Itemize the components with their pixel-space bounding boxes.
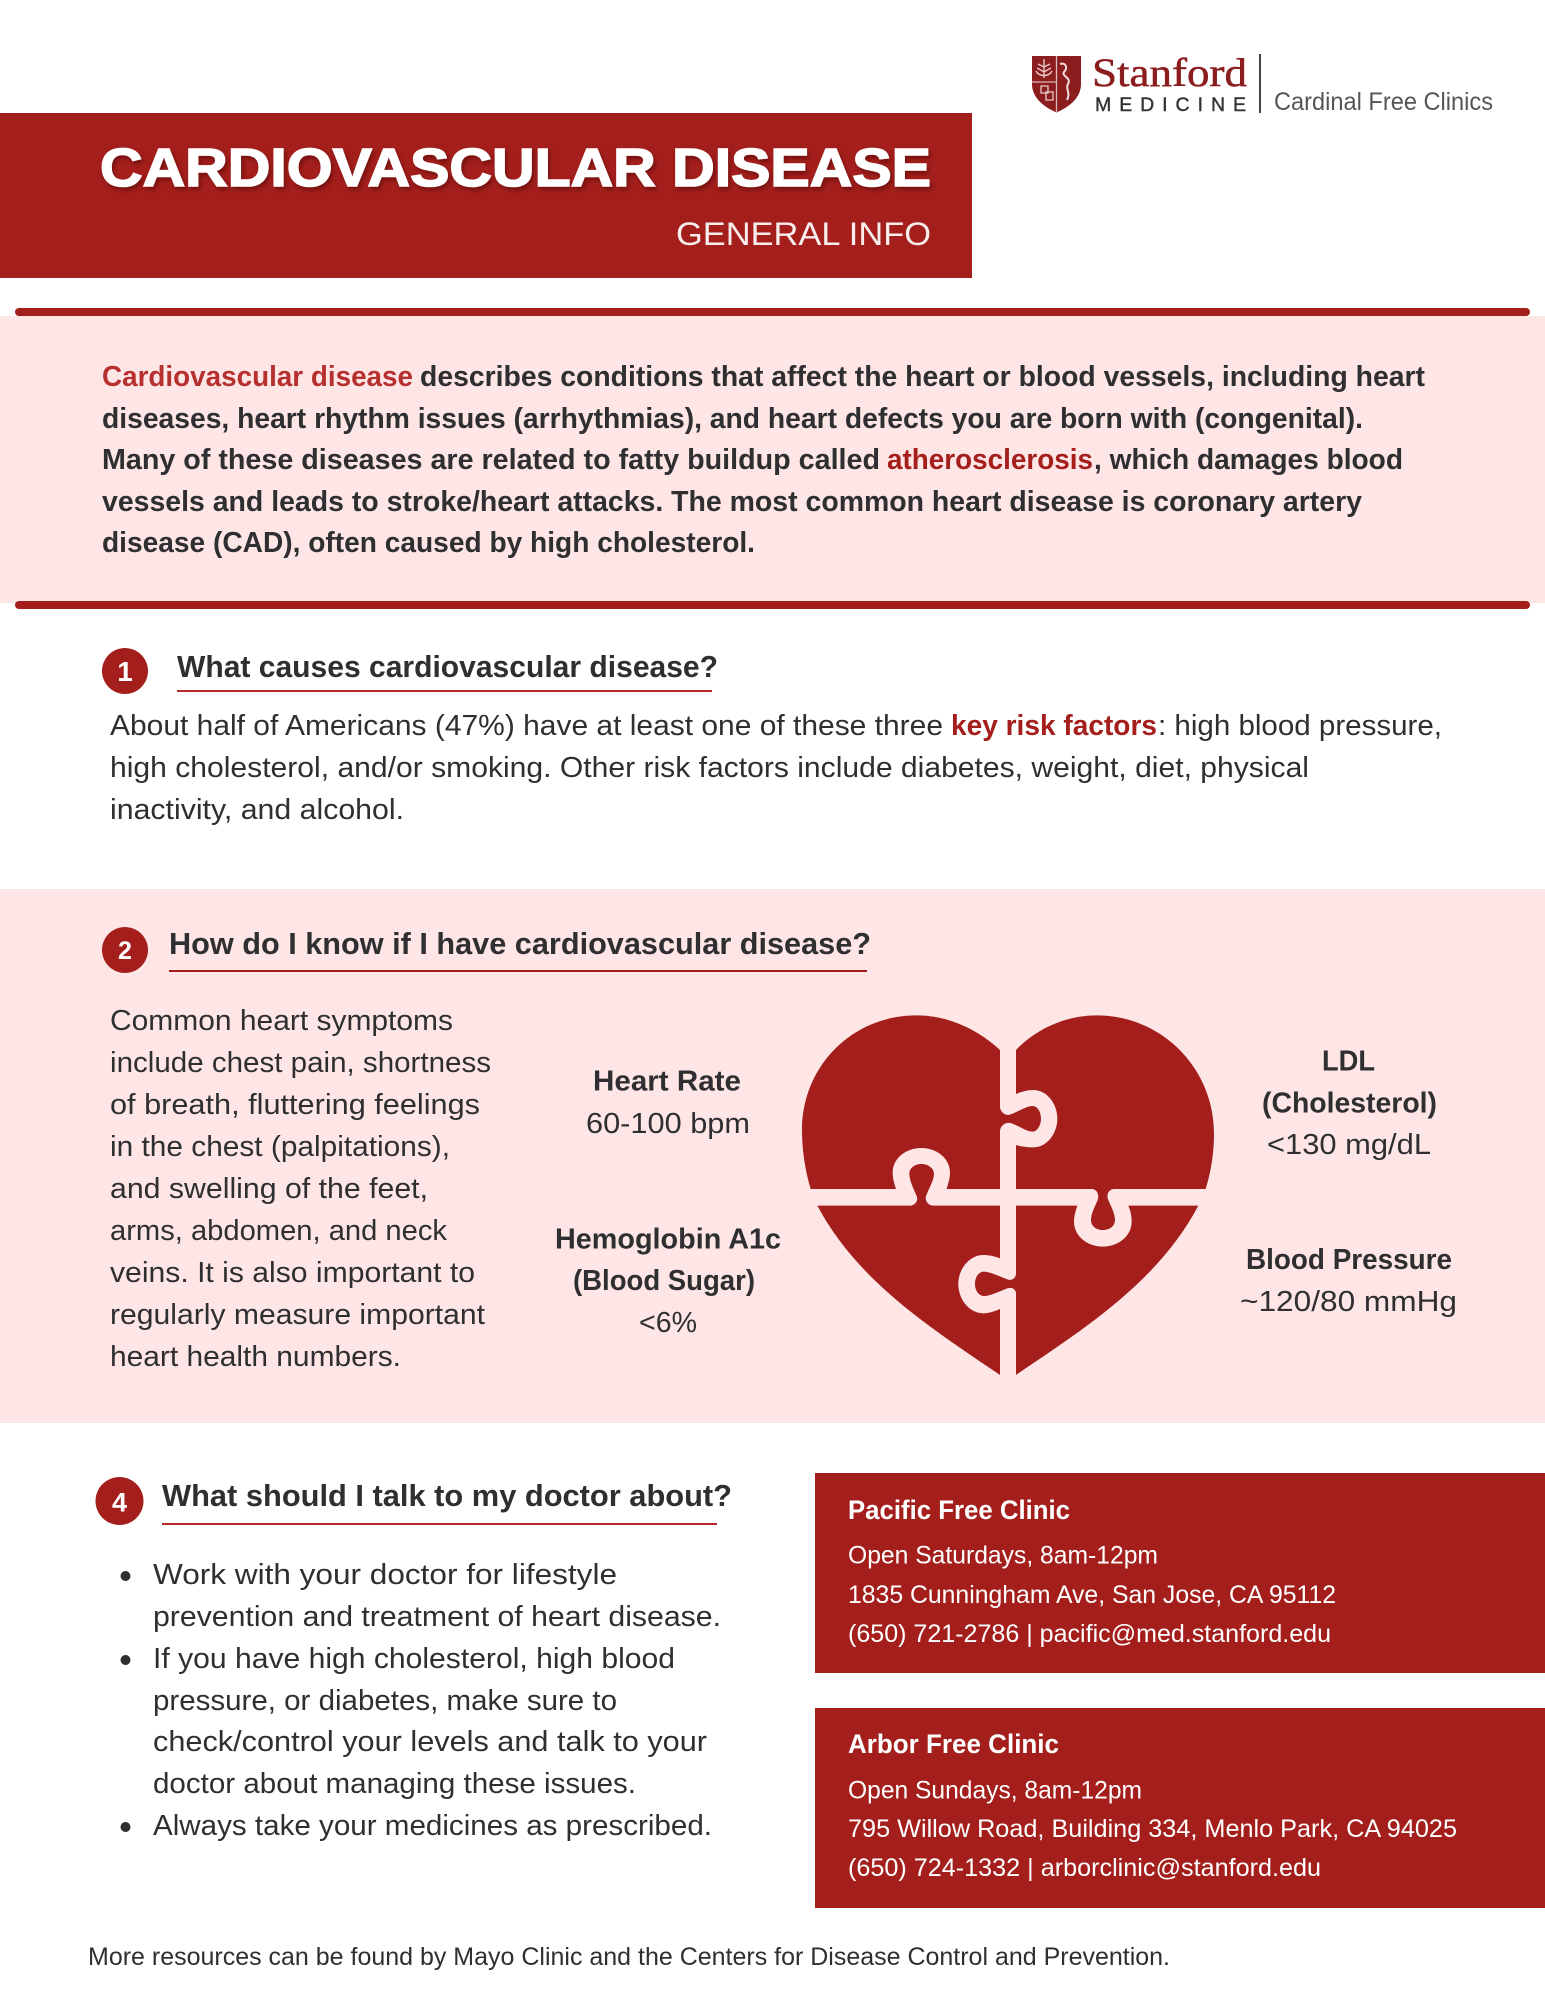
icon: puzzle heart [802,1015,1214,1375]
symptoms text: include chest pain, shortness [110,1047,491,1079]
panel: Arbor Free Clinic: 795 Willow Road, Building 334, Menlo Park, CA 94025 [848,1815,1457,1843]
panel: intro definition [0,308,1545,609]
panel: Pacific Free Clinic: (650) 721-2786 | pacific@med.stanford.edu [848,1620,1331,1648]
stat: hemoglobin: <6% [639,1307,697,1339]
intro text: atherosclerosis [887,444,1093,476]
symptoms text: regularly measure important [110,1299,485,1331]
stat: hemoglobin: Hemoglobin A1c [555,1224,781,1256]
section 1: causes [102,648,1442,826]
badge 1: 1 [117,656,133,687]
logo: Stanford Medicine Cardinal Free Clinics [1032,50,1493,116]
panel: Arbor Free Clinic [815,1708,1545,1908]
body text 1 [110,710,1442,826]
panel: diagnosis [0,889,1545,1423]
title: CARDIOVASCULAR DISEASE [100,138,931,198]
intro text [102,361,1425,559]
panel: Arbor Free Clinic: (650) 724-1332 | arborclinic@stanford.edu [848,1854,1321,1882]
bullet list: doctor about managing these issues. [153,1768,636,1800]
heading 4: What should I talk to my doctor about? [162,1478,732,1513]
intro text: , which damages blood [1094,444,1403,476]
bullet list [120,1559,721,1842]
intro text: Many of these diseases are related to fatty buildup called [102,444,880,476]
subtitle: GENERAL INFO [676,216,931,252]
stat: hemoglobin [555,1224,781,1339]
panel: Pacific Free Clinic: Pacific Free Clinic [848,1495,1070,1525]
title banner [0,113,972,278]
panel: Pacific Free Clinic: Open Saturdays, 8am-12pm [848,1542,1158,1570]
bullet list: pressure, or diabetes, make sure to [153,1685,617,1717]
stat: heart rate: Heart Rate [593,1066,741,1098]
body text 1: key risk factors [951,710,1157,742]
symptoms text: Common heart symptoms [110,1005,453,1037]
badge 2: 2 [118,937,132,965]
badge 4: 4 [112,1488,127,1518]
bullet list: check/control your levels and talk to your [153,1726,707,1758]
bullet list: Always take your medicines as prescribed. [153,1810,712,1842]
body text 1: About half of Americans (47%) have at least one of these three [110,710,943,742]
panel: Arbor Free Clinic: Arbor Free Clinic [848,1729,1059,1759]
logo: Stanford Medicine Cardinal Free Clinics: MEDICINE [1095,94,1246,116]
icon: Stanford shield [1032,56,1081,112]
section 4: doctor talk [96,1477,732,1842]
panel: Arbor Free Clinic: Open Sundays, 8am-12pm [848,1776,1142,1804]
panel: Pacific Free Clinic: 1835 Cunningham Ave, San Jose, CA 95112 [848,1581,1336,1609]
stat: LDL: <130 mg/dL [1267,1129,1431,1161]
logo: Stanford Medicine Cardinal Free Clinics: Stanford [1092,50,1247,95]
panel: Pacific Free Clinic [815,1473,1545,1673]
badge 4 [96,1477,144,1525]
intro text: disease (CAD), often caused by high cholesterol. [102,527,755,559]
symptoms text: and swelling of the feet, [110,1173,428,1205]
stat: LDL: (Cholesterol) [1262,1088,1437,1120]
badge 1 [102,648,148,694]
bullet list: prevention and treatment of heart disease. [153,1601,721,1633]
symptoms text: arms, abdomen, and neck [110,1215,447,1247]
symptoms text [110,1005,491,1373]
symptoms text: of breath, fluttering feelings [110,1089,480,1121]
body text 1: : high blood pressure, [1158,710,1442,742]
bullet list: Work with your doctor for lifestyle [153,1559,617,1591]
intro text: vessels and leads to stroke/heart attacks. The most common heart disease is coronary artery [102,486,1362,518]
intro text: diseases, heart rhythm issues (arrhythmias), and heart defects you are born with (congenital). [102,403,1363,435]
stat: LDL [1262,1046,1437,1161]
intro text: describes conditions that affect the heart or blood vessels, including heart [420,361,1425,393]
symptoms text: heart health numbers. [110,1341,401,1373]
footer note: More resources can be found by Mayo Clinic and the Centers for Disease Control and Prevention. [88,1943,1170,1971]
stat: heart rate [586,1066,750,1140]
symptoms text: in the chest (palpitations), [110,1131,450,1163]
badge 2 [102,927,148,973]
stat: blood pressure: Blood Pressure [1246,1244,1452,1276]
bullet list: If you have high cholesterol, high blood [153,1643,675,1675]
heading 1: What causes cardiovascular disease? [177,649,718,684]
stat: blood pressure: ~120/80 mmHg [1240,1286,1457,1318]
heading 2: How do I know if I have cardiovascular disease? [169,926,871,961]
symptoms text: veins. It is also important to [110,1257,475,1289]
body text 1: inactivity, and alcohol. [110,794,404,826]
stat: heart rate: 60-100 bpm [586,1108,750,1140]
body text 1: high cholesterol, and/or smoking. Other risk factors include diabetes, weight, diet, physical [110,752,1309,784]
logo: Stanford Medicine Cardinal Free Clinics: Cardinal Free Clinics [1274,88,1493,116]
intro text: Cardiovascular disease [102,361,413,393]
stat: LDL: LDL [1322,1046,1375,1078]
stat: blood pressure [1240,1244,1457,1318]
stat: hemoglobin: (Blood Sugar) [573,1265,755,1297]
